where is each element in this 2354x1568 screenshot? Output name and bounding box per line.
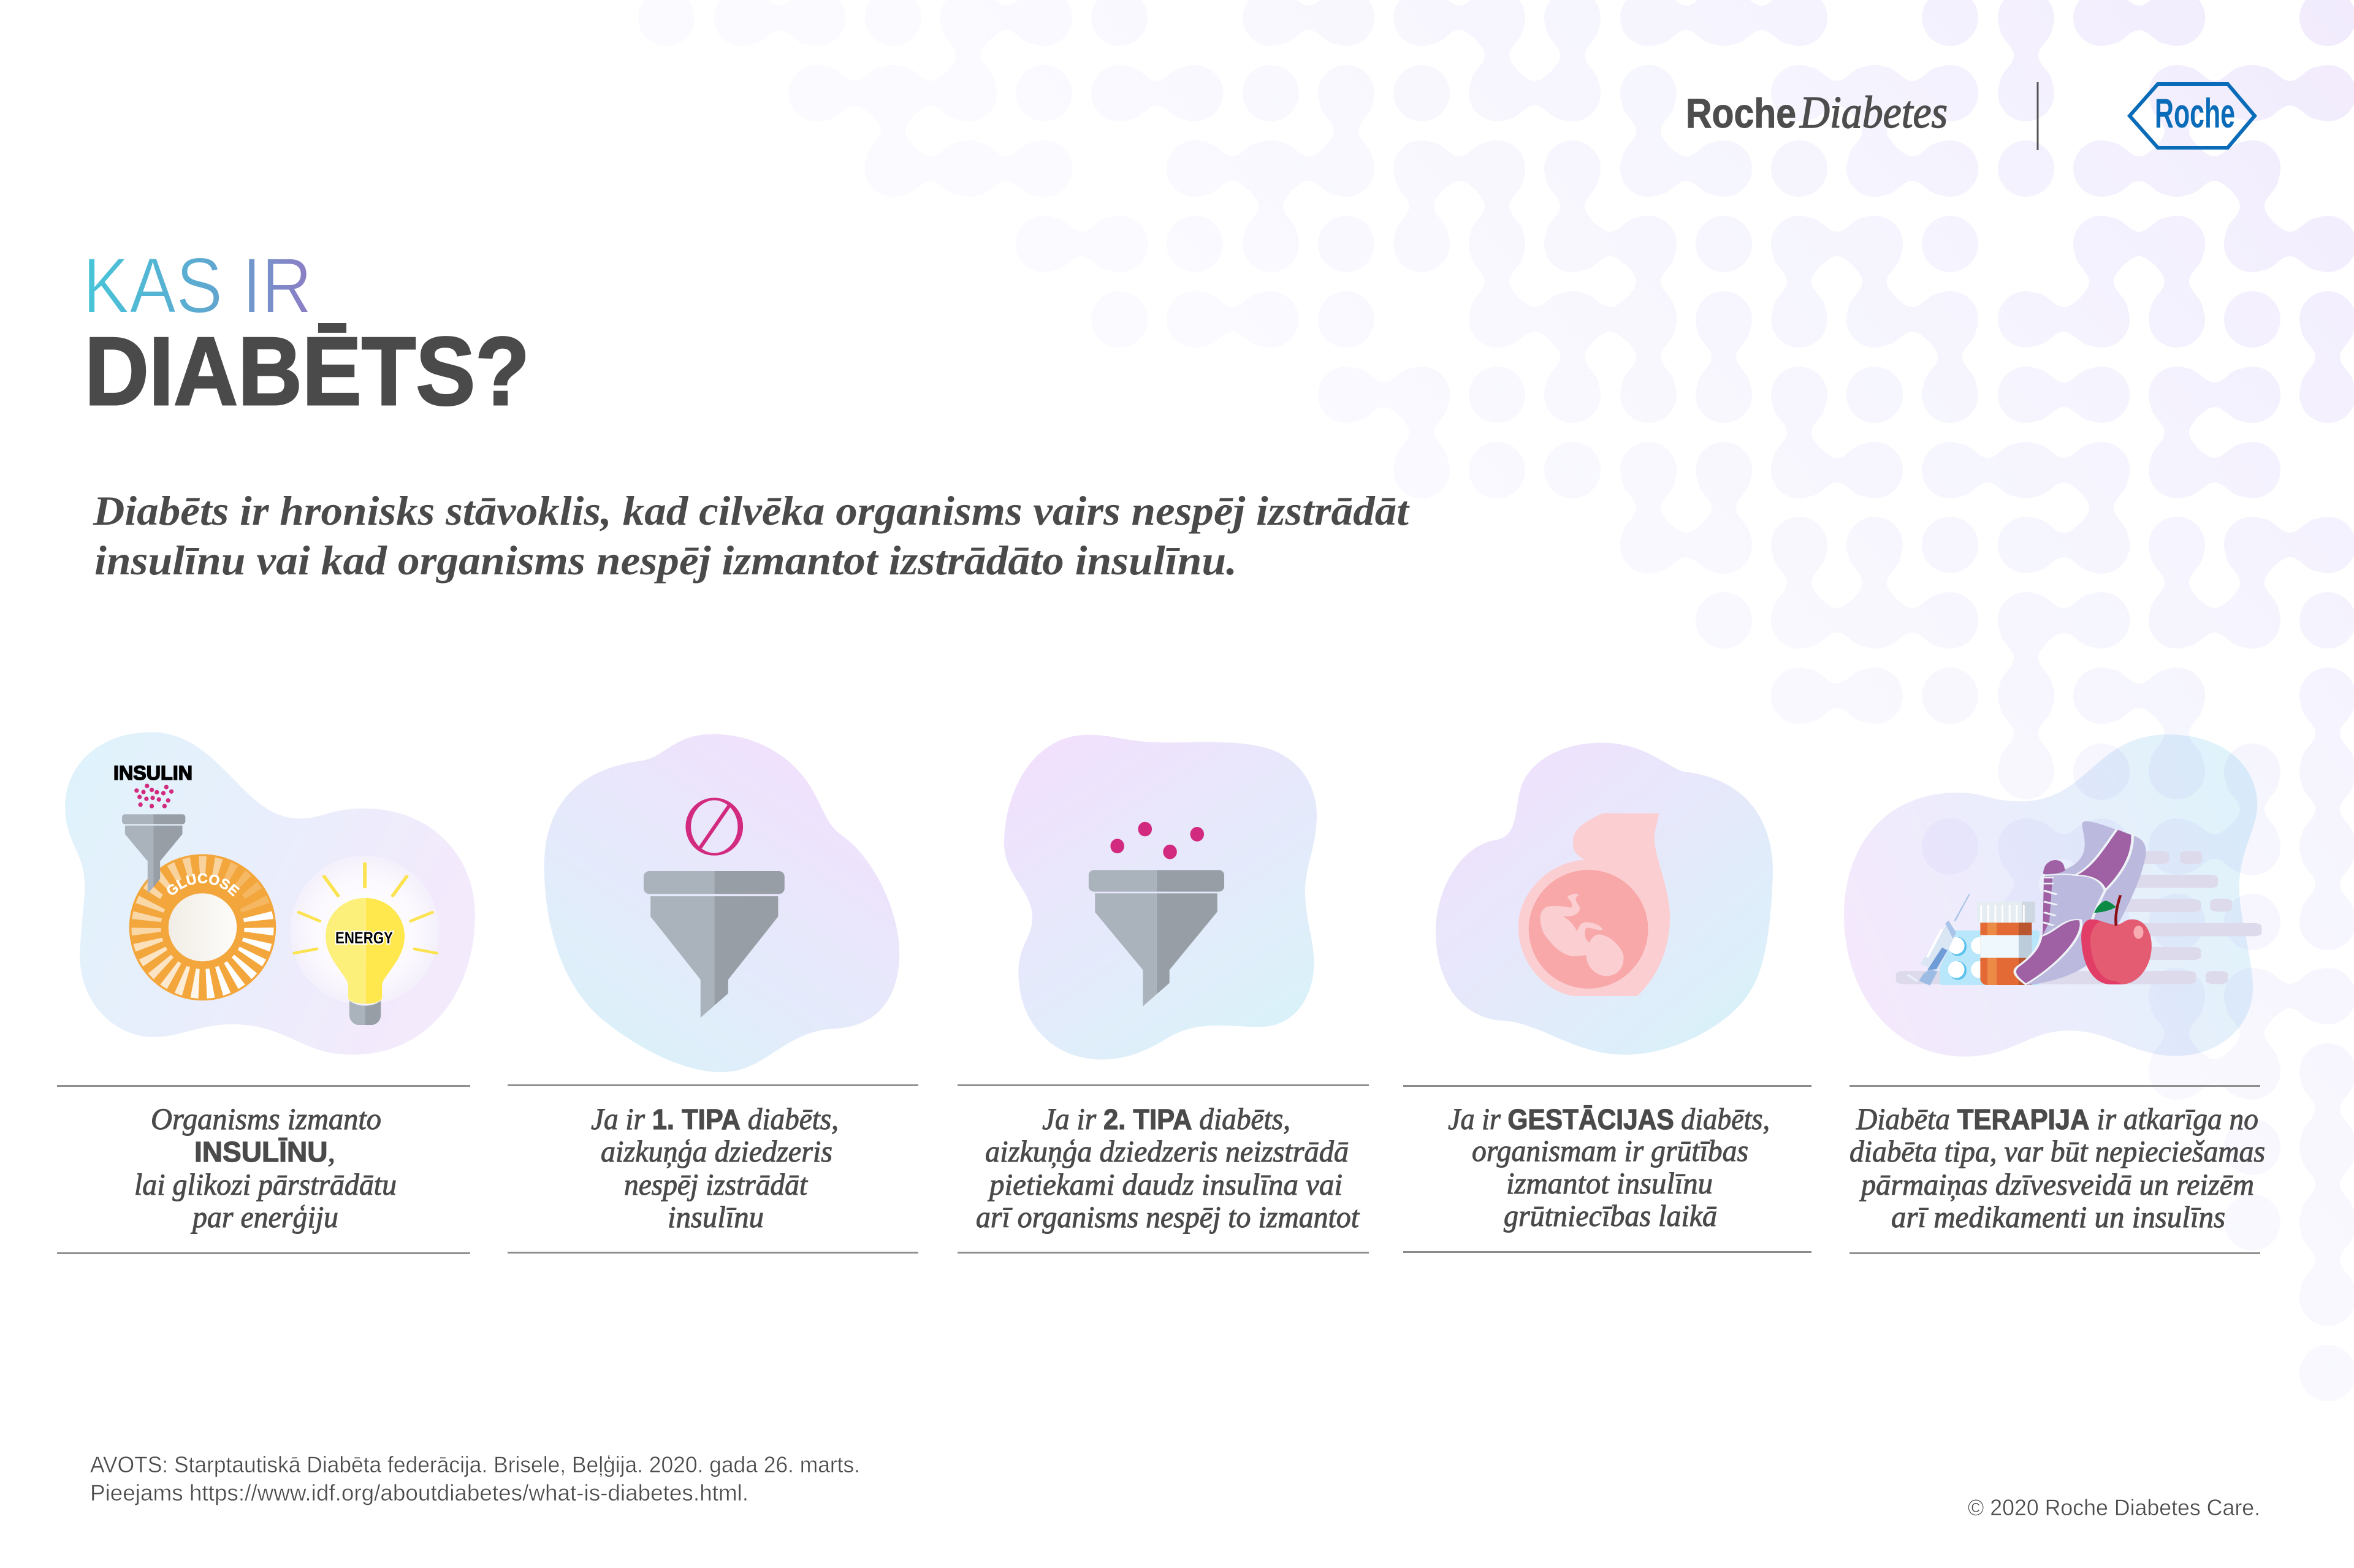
running shoe: [2015, 821, 2146, 985]
caption: gestational: [1403, 1085, 1811, 1253]
logo: Roche hexagon: [2130, 84, 2255, 148]
caption: insulin: INSULĪNU,: [194, 1134, 335, 1168]
blob: [1004, 735, 1317, 1060]
bulb glass: [326, 898, 365, 1004]
logo: Roche Diabetes: [1686, 88, 1948, 138]
no-insulin sign: [688, 799, 741, 854]
caption: gestational: izmantot insulīnu: [1506, 1166, 1713, 1200]
glucose rays: [131, 856, 274, 999]
caption: type 1: insulīnu: [668, 1200, 764, 1234]
blob: [544, 734, 899, 1072]
caption: type 2: Ja ir 2. TIPA diabēts,: [1042, 1102, 1290, 1136]
intro text: [93, 487, 1410, 584]
caption: type 2: aizkuņģa dziedzeris neizstrādā: [985, 1134, 1349, 1168]
caption: therapy: [1849, 1085, 2265, 1254]
funnel: [1089, 870, 1224, 1007]
caption: insulin: par enerģiju: [191, 1200, 338, 1234]
apple: [2081, 895, 2152, 984]
glucose centre: [169, 893, 237, 961]
panel: type 1 illustration: [544, 734, 899, 1072]
title: DIABĒTS?: [85, 318, 530, 425]
caption: insulin: lai glikozi pārstrādātu: [134, 1167, 397, 1201]
logo: Roche hexagon: Roche: [2155, 90, 2235, 137]
speed lines: [1896, 851, 2261, 984]
source note: AVOTS: Starptautiskā Diabēta federācija. Brisele, Beļģija. 2020. gada 26. marts.: [90, 1452, 860, 1477]
caption: therapy: pārmaiņas dzīvesveidā un reizēm: [1859, 1167, 2254, 1201]
glucose label band: [167, 885, 238, 906]
bulb base: [349, 1001, 365, 1025]
logo: Roche Diabetes: Roche: [1686, 90, 1796, 137]
womb: [1529, 870, 1648, 989]
caption: type 1: nespēj izstrādāt: [624, 1167, 808, 1201]
caption: therapy: diabēta tipa, var būt nepieciešamas: [1849, 1134, 2265, 1168]
caption: type 1: aizkuņģa dziedzeris: [601, 1134, 832, 1168]
caption: gestational: grūtniecības laikā: [1504, 1198, 1717, 1233]
panel: type 2 illustration: [1004, 735, 1317, 1060]
fetus: [1541, 894, 1624, 976]
blister pack: [1940, 931, 2040, 985]
caption: type 2: [958, 1084, 1369, 1254]
caption: gestational: Ja ir GESTĀCIJAS diabēts,: [1448, 1102, 1770, 1136]
label: ENERGY: ENERGY: [335, 929, 393, 947]
caption: insulin: Organisms izmanto: [151, 1102, 381, 1136]
panel: insulin illustration: [65, 732, 475, 1054]
belly: [1518, 813, 1670, 996]
caption: type 2: pietiekami daudz insulīna vai: [988, 1167, 1343, 1201]
insulin dots: [1110, 822, 1204, 859]
caption: type 2: arī organisms nespēj to izmantot: [976, 1200, 1360, 1234]
title: KAS IR: [83, 242, 312, 330]
blob: [65, 732, 475, 1055]
source note: [90, 1452, 860, 1505]
panel: gestational illustration: [1436, 743, 1773, 1055]
blob: [1844, 734, 2257, 1057]
syringe: [1907, 894, 1970, 986]
caption: gestational: organismam ir grūtības: [1472, 1133, 1748, 1168]
logo: Roche Diabetes: Diabetes: [1799, 88, 1948, 138]
funnel: [644, 871, 785, 1018]
insulin dots: [134, 783, 173, 809]
panel: therapy illustration: [1844, 734, 2261, 1057]
title: [83, 242, 530, 425]
caption: therapy: arī medikamenti un insulīns: [1891, 1200, 2225, 1234]
bulb glow: [290, 856, 439, 1005]
pill bottle: [1977, 902, 2035, 985]
copyright: © 2020 Roche Diabetes Care.: [1968, 1495, 2260, 1520]
source note: Pieejams https://www.idf.org/aboutdiabetes/what-is-diabetes.html.: [90, 1480, 748, 1505]
background dot pattern: [1343, 0, 2354, 1171]
label: GLUCOSE: GLUCOSE: [167, 873, 240, 897]
caption: insulin: [57, 1085, 470, 1254]
intro text: insulīnu vai kad organisms nespēj izmantot izstrādāto insulīnu.: [94, 537, 1237, 584]
caption: therapy: Diabēta TERAPIJA ir atkarīga no: [1856, 1102, 2258, 1136]
caption: type 1: [508, 1084, 918, 1254]
intro text: Diabēts ir hronisks stāvoklis, kad cilvēka organisms vairs nespēj izstrādāt: [93, 487, 1410, 534]
glucose disc: [129, 854, 276, 1000]
funnel: [122, 814, 185, 894]
bulb rays: [294, 864, 436, 953]
logo divider: [2036, 82, 2039, 150]
blob: [1436, 743, 1773, 1055]
caption: type 1: Ja ir 1. TIPA diabēts,: [591, 1102, 839, 1136]
label: INSULIN: INSULIN: [113, 762, 192, 784]
